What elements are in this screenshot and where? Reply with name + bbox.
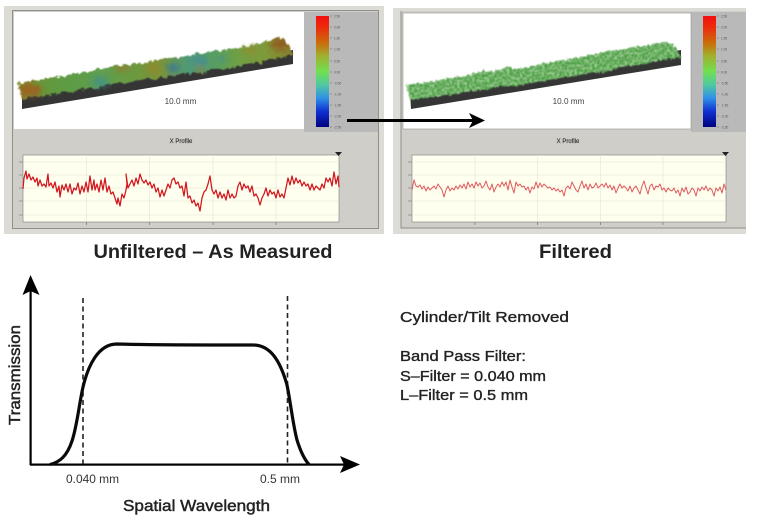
panel: filtered measurement — [393, 8, 746, 234]
tick label: 0.5 mm: 0.5 mm — [260, 472, 300, 486]
scale label: 10.0 mm — [165, 97, 197, 106]
color scale: 2.50 — [334, 14, 340, 18]
y axis — [22, 275, 40, 465]
panel: unfiltered measurement — [4, 6, 384, 234]
color scale: -1.50 — [721, 104, 728, 108]
axis title: spatial wavelength: Spatial Wavelength — [123, 498, 270, 515]
color scale: -0.50 — [721, 82, 728, 86]
transmission curve — [50, 344, 309, 464]
cutoff line: 0.040 mm — [82, 298, 84, 464]
arrow: unfiltered to filtered — [347, 113, 485, 128]
chart title: X Profile — [170, 139, 193, 145]
color scale: -0.50 — [334, 82, 341, 86]
profile chart: unfiltered — [19, 152, 342, 225]
text block: filter settings: S–Filter = 0.040 mm — [400, 369, 546, 385]
color scale: 1.00 — [334, 48, 340, 52]
color scale: 1.50 — [334, 36, 340, 40]
color scale — [703, 14, 728, 130]
profile chart: filtered — [408, 152, 729, 225]
color scale: -1.00 — [721, 92, 728, 96]
color scale: 2.50 — [721, 14, 727, 18]
heading: unfiltered: Unfiltered – As Measured — [94, 241, 332, 263]
x axis — [30, 456, 360, 473]
color scale: -2.00 — [334, 114, 341, 118]
color scale: 1.50 — [721, 36, 727, 40]
chart: band pass transmission — [7, 275, 360, 515]
cutoff line: 0.5 mm — [286, 296, 288, 464]
color scale: 0.00 — [721, 70, 727, 74]
text block: filter settings: Cylinder/Tilt Removed — [400, 310, 569, 326]
chart title: X Profile — [557, 139, 580, 145]
color scale: -2.00 — [721, 114, 728, 118]
color scale — [316, 14, 341, 130]
heading: filtered: Filtered — [539, 241, 612, 263]
color scale: -1.50 — [334, 104, 341, 108]
text block: filter settings: L–Filter = 0.5 mm — [400, 388, 528, 404]
3D surface: filtered — [406, 42, 681, 109]
axis title: transmission: Transmission — [7, 325, 24, 425]
color scale: 0.00 — [334, 70, 340, 74]
color scale: -2.50 — [334, 126, 341, 130]
color scale: 2.00 — [721, 26, 727, 30]
color scale: 0.50 — [721, 60, 727, 64]
color scale: -2.50 — [721, 126, 728, 130]
scale label: 10.0 mm — [553, 97, 585, 106]
color scale: 0.50 — [334, 60, 340, 64]
text block: filter settings — [400, 310, 569, 404]
3D surface: unfiltered — [17, 38, 293, 109]
text block: filter settings: Band Pass Filter: — [400, 349, 526, 365]
tick label: 0.040 mm: 0.040 mm — [66, 472, 119, 486]
color scale: 2.00 — [334, 26, 340, 30]
color scale: 1.00 — [721, 48, 727, 52]
color scale: -1.00 — [334, 92, 341, 96]
